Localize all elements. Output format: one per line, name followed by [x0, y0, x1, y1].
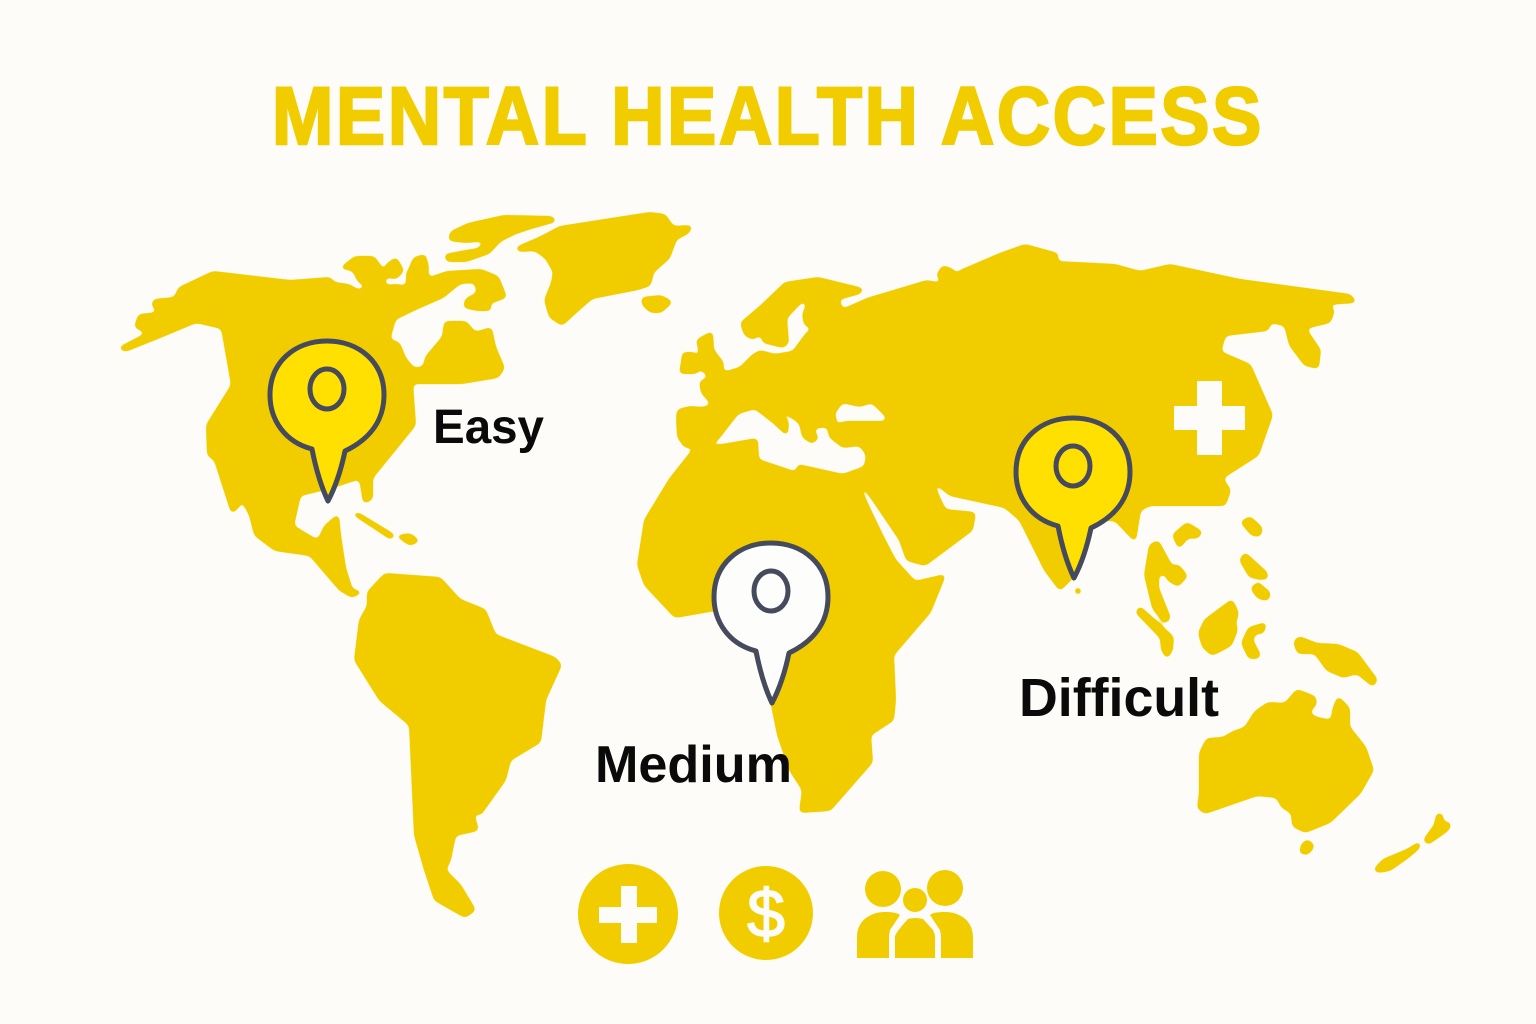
- label: Difficult: Difficult: [1019, 668, 1219, 728]
- pin: difficult: [1016, 418, 1130, 578]
- label: Easy: Easy: [433, 401, 544, 454]
- Iceland: [642, 296, 672, 312]
- world map: [119, 213, 1451, 917]
- New Zealand south: [1374, 842, 1420, 872]
- Ireland: [680, 353, 699, 373]
- icon: dollar: $: [747, 876, 785, 952]
- Greenland: [516, 213, 692, 325]
- icon: white medical cross on Asia: [1174, 381, 1245, 455]
- Southeast Asia islands: [1136, 517, 1270, 658]
- Sri Lanka: [1075, 588, 1081, 594]
- Cuba: [353, 513, 394, 539]
- Eurasia and Africa: [638, 245, 1356, 812]
- arctic island: Baffin: [445, 216, 556, 261]
- New Zealand north: [1424, 814, 1451, 844]
- Australia: [1198, 690, 1373, 832]
- arctic island: small: [386, 258, 403, 278]
- Britain: [697, 332, 723, 377]
- label: Medium: Medium: [595, 736, 792, 794]
- South America: [355, 574, 561, 917]
- title: MENTAL HEALTH ACCESS: [272, 71, 1264, 162]
- pin: easy: [270, 341, 384, 501]
- icon: people group: [857, 870, 973, 958]
- New Guinea: [1294, 637, 1377, 686]
- North America: [119, 255, 506, 597]
- Tasmania: [1300, 840, 1314, 854]
- pin: medium: [714, 543, 828, 703]
- icon: dollar: [719, 866, 813, 960]
- icon: medical cross: [578, 864, 678, 964]
- Hispaniola: [397, 534, 419, 545]
